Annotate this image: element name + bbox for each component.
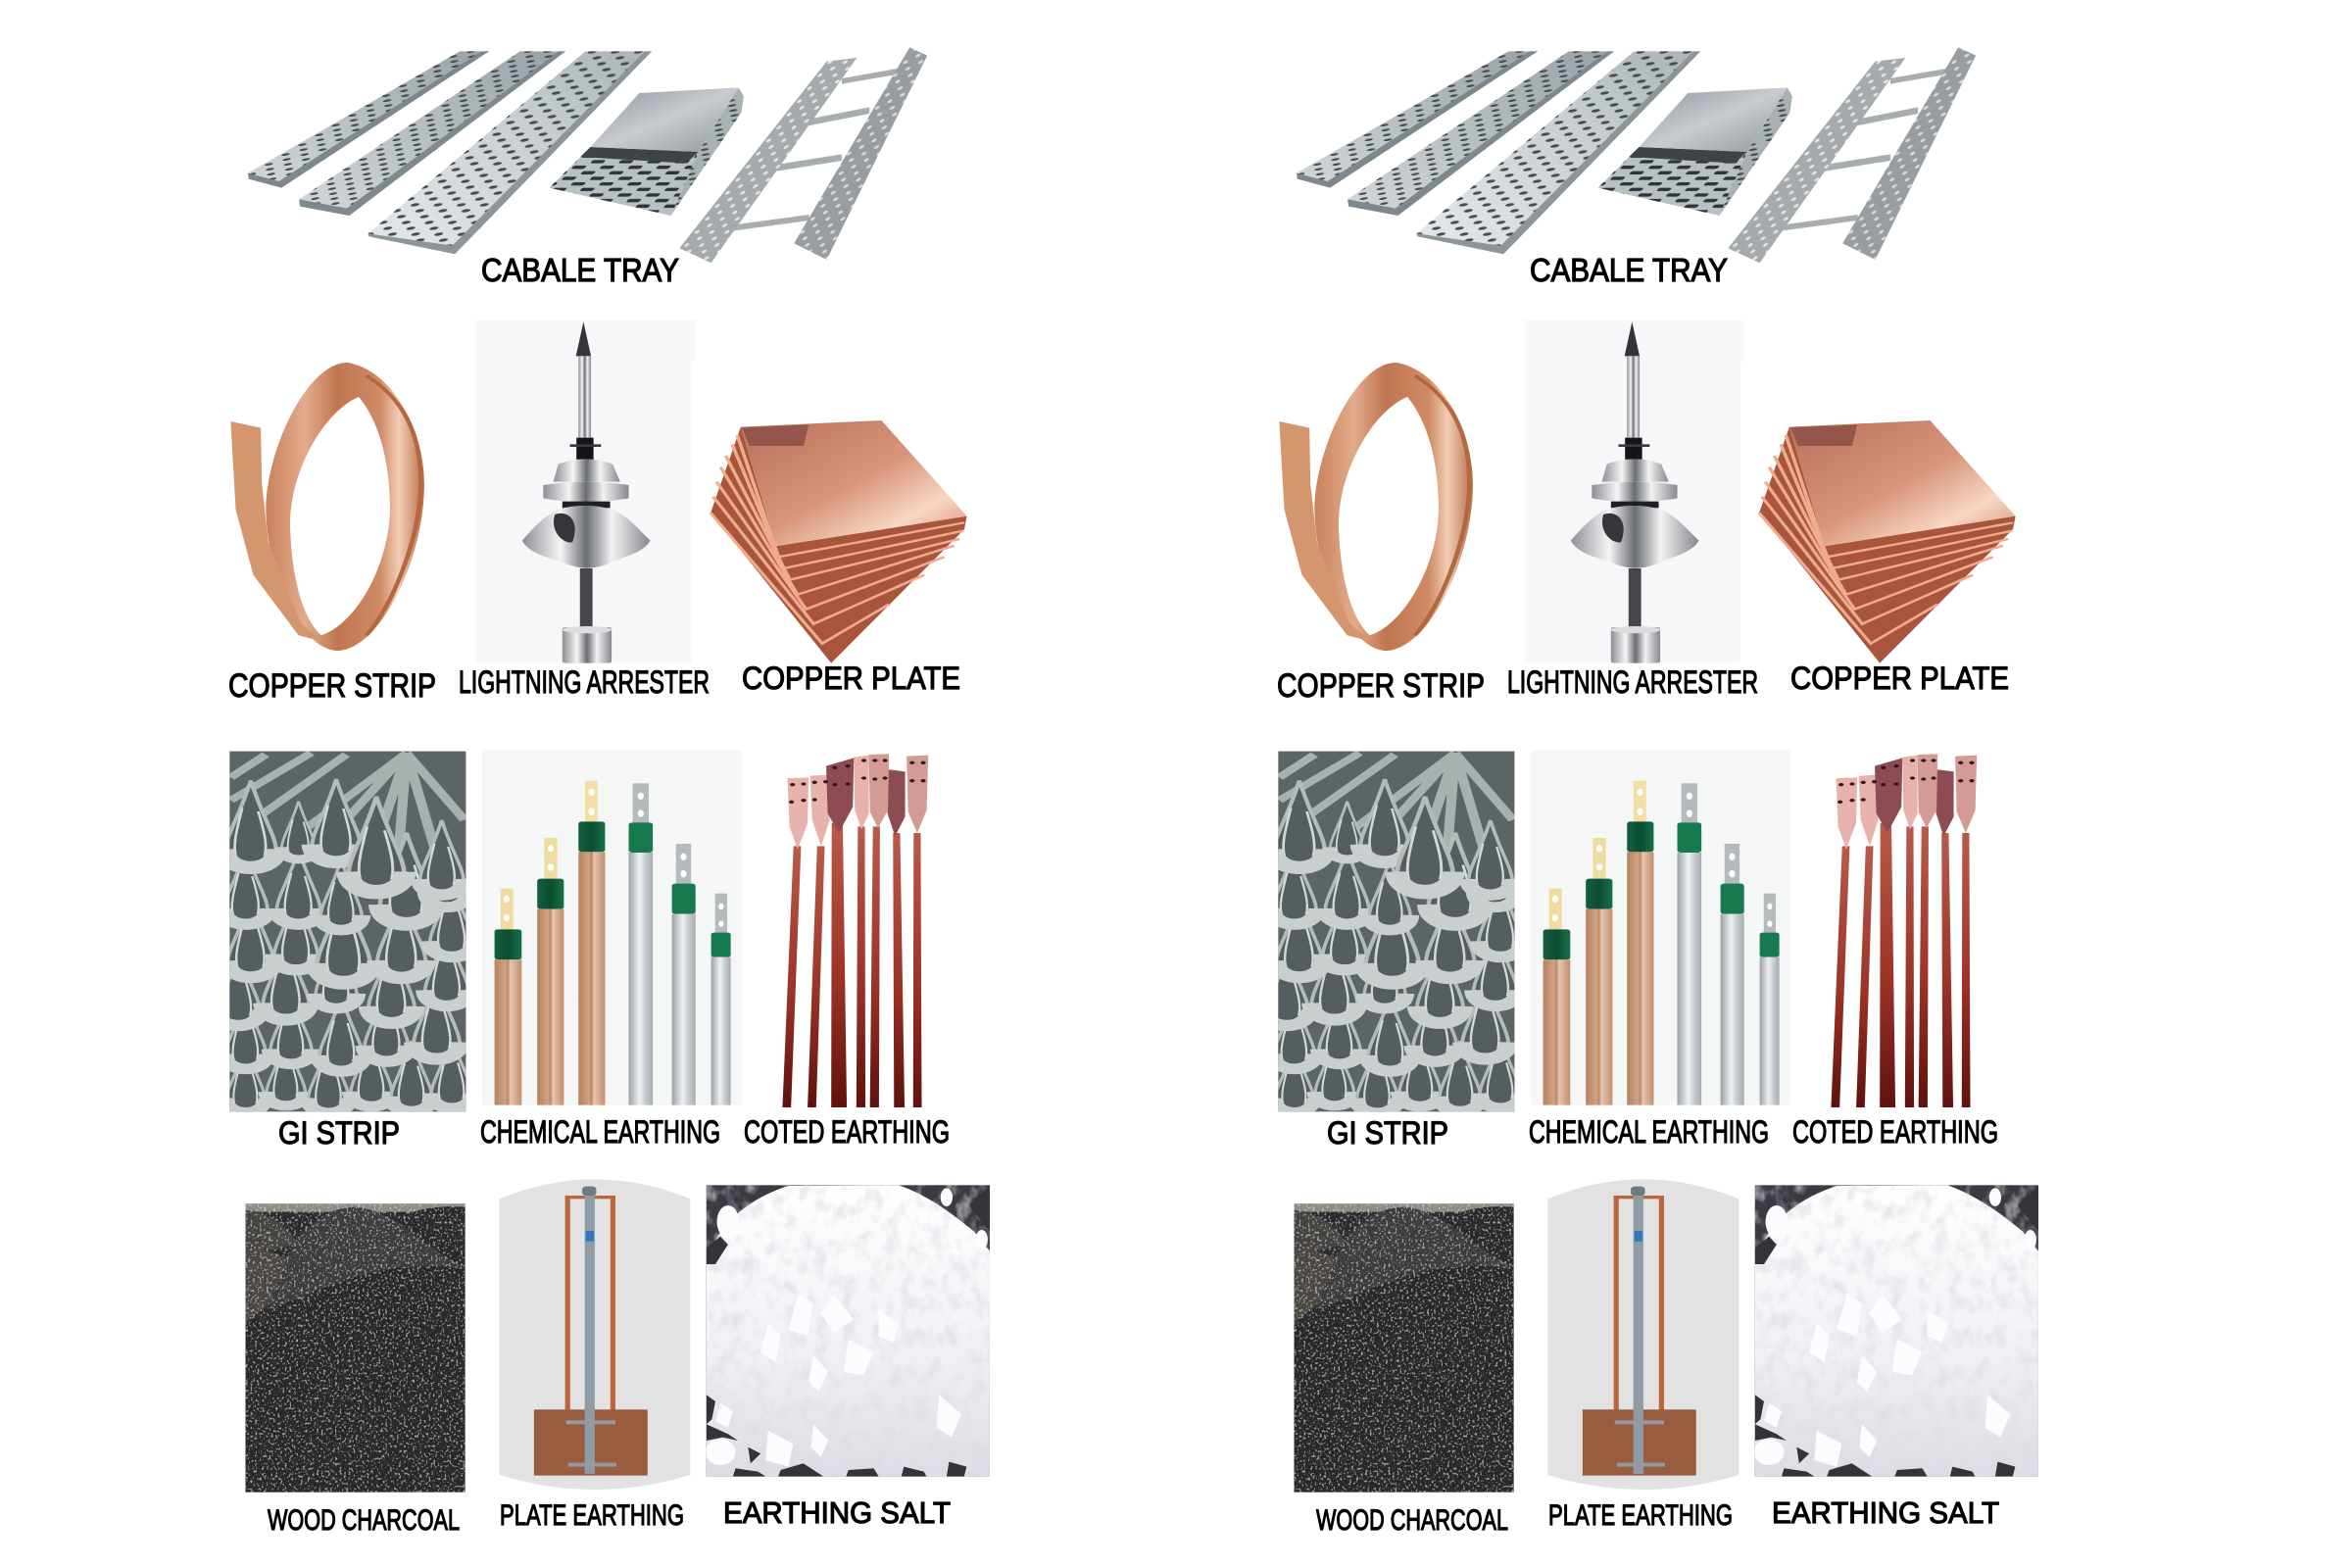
image: GI strip bbox=[1264, 752, 1523, 1113]
image: copper strip bbox=[230, 363, 424, 651]
image: GI strip bbox=[216, 752, 474, 1113]
label: GI strip: GI STRIP bbox=[278, 1115, 400, 1151]
label: copper strip: COPPER STRIP bbox=[228, 667, 436, 705]
label: copper strip: COPPER STRIP bbox=[1277, 667, 1485, 705]
image: earthing salt bbox=[706, 1185, 990, 1477]
image: cable trays bbox=[1297, 47, 1976, 263]
label: copper plate: COPPER PLATE bbox=[1790, 661, 2009, 696]
image: plate earthing bbox=[499, 1179, 690, 1490]
image: coted earthing bbox=[782, 754, 928, 1107]
image: cable trays bbox=[248, 47, 927, 263]
image: wood charcoal bbox=[246, 1203, 466, 1493]
image: copper plate bbox=[1759, 420, 2016, 663]
label: wood charcoal: WOOD CHARCOAL bbox=[1316, 1504, 1508, 1537]
image: copper plate bbox=[710, 420, 967, 663]
label: chemical earthing: CHEMICAL EARTHING bbox=[1529, 1114, 1769, 1150]
label: plate earthing: PLATE EARTHING bbox=[500, 1499, 684, 1532]
label: earthing salt: EARTHING SALT bbox=[723, 1495, 951, 1530]
label: coted earthing: COTED EARTHING bbox=[744, 1114, 950, 1150]
label: lightning arrester: LIGHTNING ARRESTER bbox=[1507, 664, 1758, 700]
label: GI strip: GI STRIP bbox=[1327, 1115, 1448, 1151]
label: coted earthing: COTED EARTHING bbox=[1792, 1114, 1998, 1150]
image: copper strip bbox=[1279, 363, 1473, 651]
panel: left catalogue bbox=[216, 47, 990, 1537]
label: earthing salt: EARTHING SALT bbox=[1772, 1495, 1999, 1530]
image: earthing salt bbox=[1754, 1185, 2038, 1477]
label: wood charcoal: WOOD CHARCOAL bbox=[268, 1504, 460, 1537]
label: cable tray: CABALE TRAY bbox=[481, 252, 679, 288]
panel: right catalogue bbox=[1264, 47, 2038, 1537]
label: lightning arrester: LIGHTNING ARRESTER bbox=[459, 664, 710, 700]
image: chemical earthing bbox=[1531, 751, 1790, 1105]
image: coted earthing bbox=[1831, 754, 1977, 1107]
image: wood charcoal bbox=[1295, 1203, 1514, 1493]
label: copper plate: COPPER PLATE bbox=[742, 661, 960, 696]
label: cable tray: CABALE TRAY bbox=[1530, 252, 1728, 288]
image: chemical earthing bbox=[482, 751, 742, 1105]
label: chemical earthing: CHEMICAL EARTHING bbox=[480, 1114, 720, 1150]
image: lightning arrester bbox=[1525, 320, 1744, 663]
image: lightning arrester bbox=[476, 320, 696, 663]
image: plate earthing bbox=[1547, 1179, 1739, 1490]
label: plate earthing: PLATE EARTHING bbox=[1548, 1499, 1733, 1532]
